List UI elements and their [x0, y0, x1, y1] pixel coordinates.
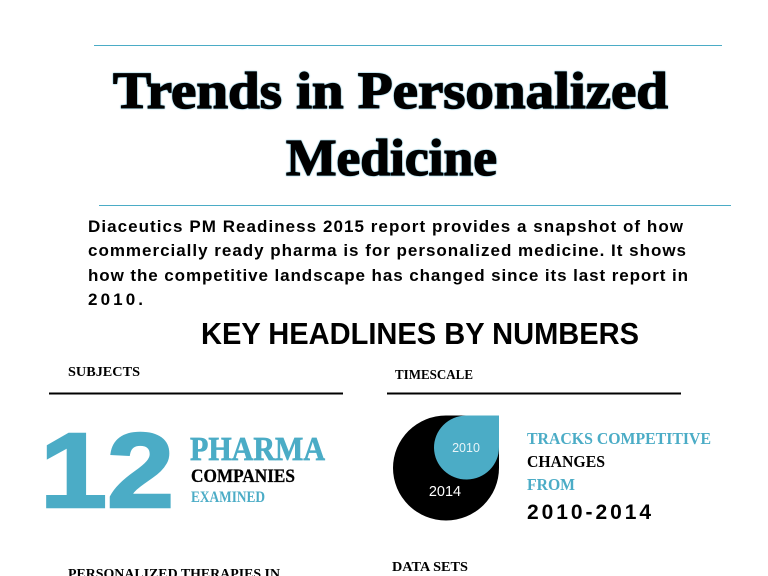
- title: Medicine: [286, 130, 497, 187]
- chart: 2014 vs 2010 teardrops: [393, 416, 499, 520]
- intro text block: commercially ready pharma is for personalized medicine. It shows: [88, 241, 686, 260]
- timescale heading: TIMESCALE: [395, 368, 473, 383]
- pharma companies examined: PHARMA: [190, 431, 325, 468]
- tracks competitive changes text: 2010-2014: [527, 501, 651, 524]
- pharma companies examined: EXAMINED: [191, 489, 265, 506]
- tracks competitive changes text: CHANGES: [527, 452, 605, 471]
- title: [113, 63, 668, 187]
- intro text block: Diaceutics PM Readiness 2015 report provides a snapshot of how: [88, 217, 684, 236]
- heading: data sets: DATA SETS: [392, 560, 468, 575]
- title: Trends in Personalized: [113, 63, 668, 120]
- pharma companies examined: [190, 431, 325, 506]
- chart: 2014 vs 2010 teardrops: 2010: [452, 441, 480, 455]
- chart: 2014 vs 2010 teardrops: 2014: [429, 484, 461, 500]
- panel: subjects: [40, 365, 343, 530]
- section heading: KEY HEADLINES BY NUMBERS: [201, 316, 639, 351]
- intro text block: [88, 217, 688, 309]
- pharma companies examined: COMPANIES: [191, 466, 295, 487]
- tracks competitive changes text: TRACKS COMPETITIVE: [527, 429, 711, 448]
- big number 12: 12: [40, 412, 174, 530]
- tracks competitive changes text: FROM: [527, 475, 575, 494]
- intro text block: 2010.: [88, 290, 143, 309]
- subjects heading: SUBJECTS: [68, 365, 140, 380]
- tracks competitive changes text: [527, 429, 711, 524]
- intro text block: how the competitive landscape has changed since its last report in: [88, 266, 688, 285]
- panel: timescale: [387, 368, 711, 524]
